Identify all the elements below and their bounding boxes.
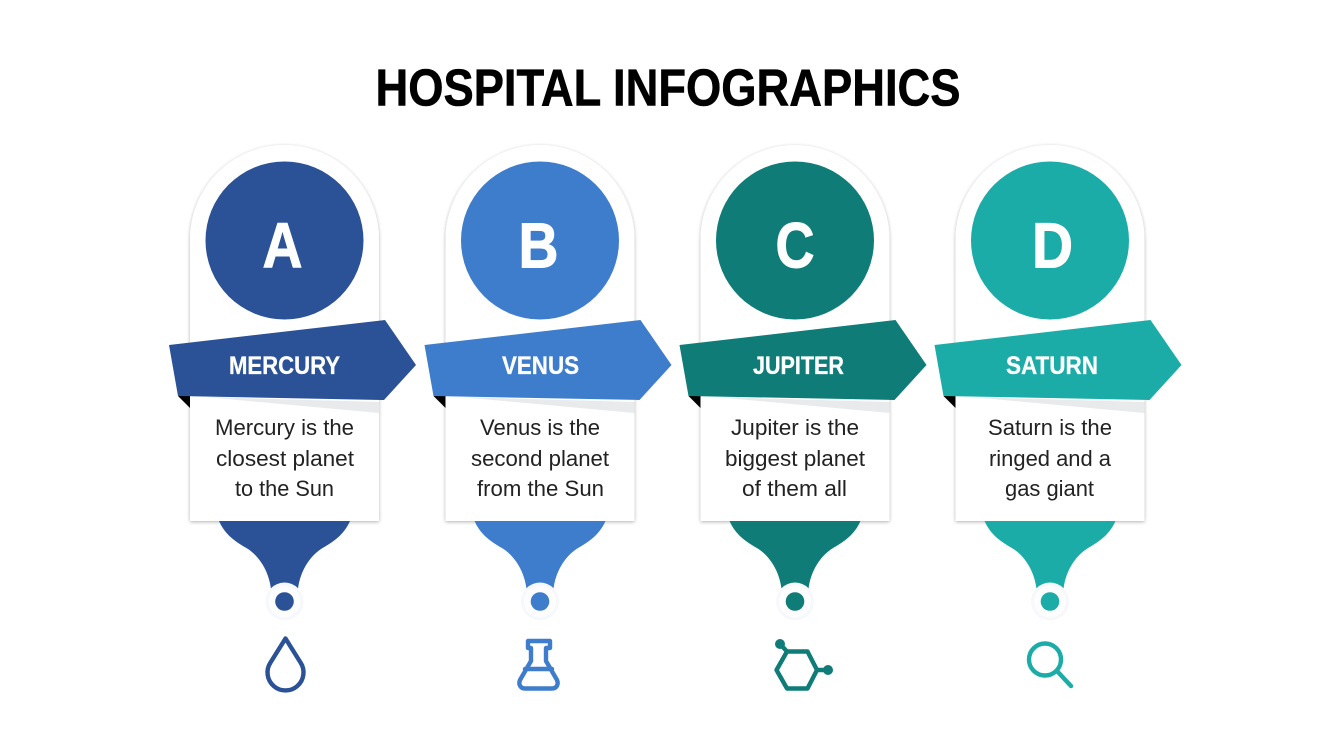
ribbon bbox=[169, 320, 416, 400]
letter C: C bbox=[776, 210, 814, 282]
description bbox=[215, 415, 355, 501]
description: closest planet bbox=[216, 446, 355, 471]
letter B: B bbox=[518, 210, 558, 282]
marker dot bbox=[266, 582, 304, 620]
letter circle bbox=[971, 162, 1129, 320]
card bbox=[446, 145, 634, 521]
ribbon fold bbox=[688, 396, 700, 408]
ribbon bbox=[934, 320, 1182, 400]
ribbon label: JUPITER bbox=[753, 352, 844, 380]
panel: C Jupiter bbox=[680, 145, 926, 688]
card bbox=[700, 145, 890, 521]
letter D: D bbox=[1032, 210, 1073, 282]
card bbox=[956, 145, 1144, 521]
ribbon fold bbox=[178, 396, 190, 408]
description bbox=[988, 415, 1112, 501]
description: gas giant bbox=[1005, 476, 1095, 501]
title: HOSPITAL INFOGRAPHICS bbox=[376, 58, 960, 116]
ribbon shadow bbox=[460, 397, 634, 413]
ribbon label: VENUS bbox=[502, 352, 579, 380]
panel: D Saturn bbox=[934, 145, 1182, 686]
description: Saturn is the bbox=[988, 415, 1112, 440]
letter A: A bbox=[262, 210, 302, 282]
panel: B Venus bbox=[424, 145, 672, 688]
ribbon fold bbox=[944, 396, 956, 408]
letter circle bbox=[461, 162, 619, 320]
marker dot bbox=[521, 582, 559, 620]
icon: water drop bbox=[268, 638, 304, 690]
funnel bbox=[730, 521, 860, 589]
description: of them all bbox=[742, 476, 847, 501]
card bbox=[190, 145, 379, 521]
description: from the Sun bbox=[477, 476, 604, 501]
funnel bbox=[219, 521, 350, 589]
ribbon label: MERCURY bbox=[229, 352, 340, 380]
ribbon shadow bbox=[716, 397, 890, 413]
description bbox=[725, 415, 866, 501]
ribbon shadow bbox=[970, 397, 1144, 413]
description: Jupiter is the bbox=[731, 415, 859, 440]
description: second planet bbox=[471, 446, 610, 471]
ribbon label: SATURN bbox=[1006, 352, 1098, 380]
letter circle bbox=[716, 162, 874, 320]
icon: molecule bbox=[775, 639, 833, 688]
description bbox=[471, 415, 610, 501]
ribbon fold bbox=[434, 396, 446, 408]
ribbon bbox=[424, 320, 672, 400]
funnel bbox=[984, 521, 1116, 589]
description: Mercury is the bbox=[215, 415, 354, 440]
description: ringed and a bbox=[989, 446, 1111, 471]
panel: A Mercury bbox=[169, 145, 416, 690]
ribbon shadow bbox=[205, 397, 379, 413]
marker dot bbox=[776, 582, 814, 620]
description: to the Sun bbox=[235, 476, 334, 501]
letter circle bbox=[206, 162, 364, 320]
marker dot bbox=[1031, 582, 1069, 620]
ribbon bbox=[680, 320, 926, 400]
icon: magnifier bbox=[1029, 644, 1071, 686]
icon: flask bbox=[519, 641, 558, 688]
description: Venus is the bbox=[480, 415, 600, 440]
description: biggest planet bbox=[725, 446, 866, 471]
funnel bbox=[474, 521, 606, 589]
